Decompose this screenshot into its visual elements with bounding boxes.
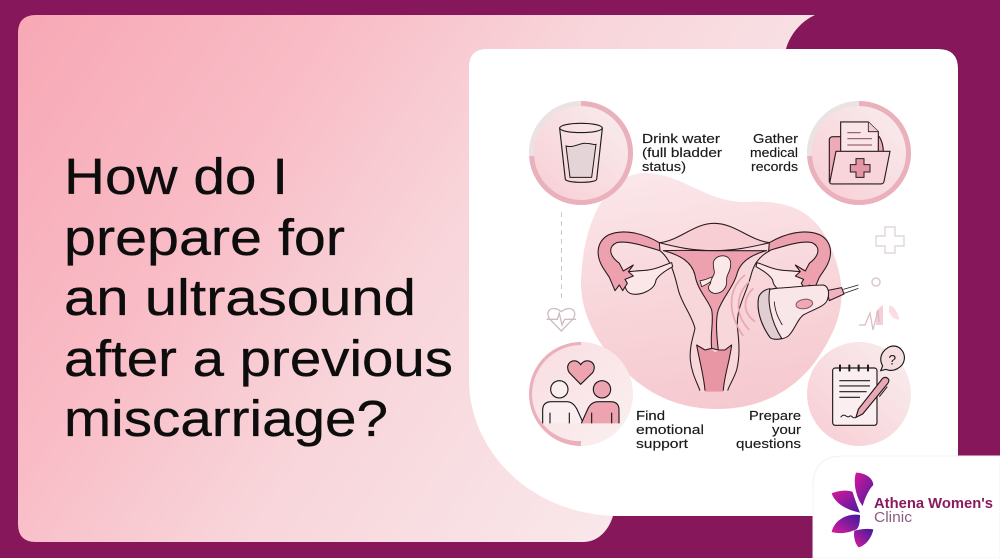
- label: find emotional support: Find: [636, 408, 665, 423]
- title: after a previous: [64, 330, 453, 387]
- label: drink water: [642, 131, 723, 174]
- label: drink water: status): [642, 159, 686, 174]
- label: drink water: (full bladder: [642, 145, 723, 160]
- dashed connector: [560, 212, 562, 298]
- label: prepare your questions: Prepare: [749, 408, 801, 423]
- label: drink water: Drink water: [642, 131, 721, 146]
- icon disc: people: [529, 342, 633, 446]
- title: [64, 148, 453, 447]
- label: gather medical records: Gather: [753, 131, 799, 146]
- title: prepare for: [64, 209, 345, 266]
- icon: plus outline: [876, 227, 904, 253]
- icon: heart with pulse: [547, 308, 576, 331]
- icon: glass of water: [560, 123, 602, 182]
- uterine cavity: [663, 250, 767, 350]
- central pink blob: [581, 173, 842, 409]
- white content panel: [469, 49, 958, 516]
- label: prepare your questions: questions: [736, 436, 801, 451]
- logo card: [813, 456, 1000, 558]
- pink left panel: [18, 15, 815, 542]
- ultrasound probe: [758, 285, 858, 339]
- uterine outer walls: [660, 251, 770, 391]
- uterus body fill: [660, 250, 770, 392]
- icon: two people with heart: [543, 361, 619, 423]
- label: find emotional support: [636, 408, 704, 451]
- panel: gather medical records: [750, 101, 911, 205]
- icon: small ring: [872, 278, 880, 286]
- logo wordmark: Athena Women's: [874, 495, 993, 512]
- label: gather medical records: records: [751, 159, 798, 174]
- icon: pulse with faded shapes: [859, 306, 899, 330]
- vaginal canal: [697, 345, 732, 392]
- title: How do I: [64, 148, 288, 205]
- label: prepare your questions: your: [772, 422, 802, 437]
- label: find emotional support: emotional: [636, 422, 704, 437]
- panel: prepare questions: [736, 342, 911, 451]
- title: an ultrasound: [64, 269, 416, 326]
- label: gather medical records: medical: [750, 145, 798, 160]
- logo: butterfly petals: [832, 473, 873, 547]
- embryo: [700, 256, 731, 293]
- label: find emotional support: support: [636, 436, 689, 451]
- uterus fundus dome: [659, 223, 770, 251]
- icon: notepad, pencil and question bubble: [833, 346, 904, 425]
- panel: drink water: [529, 101, 723, 205]
- icon: notepad, pencil and question bubble: ?: [888, 351, 896, 367]
- left fallopian tube and ovary: [598, 232, 673, 294]
- label: gather medical records: [750, 131, 799, 174]
- icon disc: glass: [529, 101, 633, 205]
- icon: medical folder: [829, 122, 890, 184]
- right fallopian tube and ovary: [756, 232, 831, 294]
- icon disc: notepad: [807, 342, 911, 446]
- logo card: Clinic: [874, 509, 913, 526]
- ultrasound waves: [732, 275, 755, 336]
- uterus illustration: [598, 223, 858, 392]
- card background: [813, 456, 1000, 558]
- panel: emotional support: [529, 342, 704, 451]
- icon disc: folder: [807, 101, 911, 205]
- title: miscarriage?: [64, 390, 388, 447]
- label: prepare your questions: [736, 408, 802, 451]
